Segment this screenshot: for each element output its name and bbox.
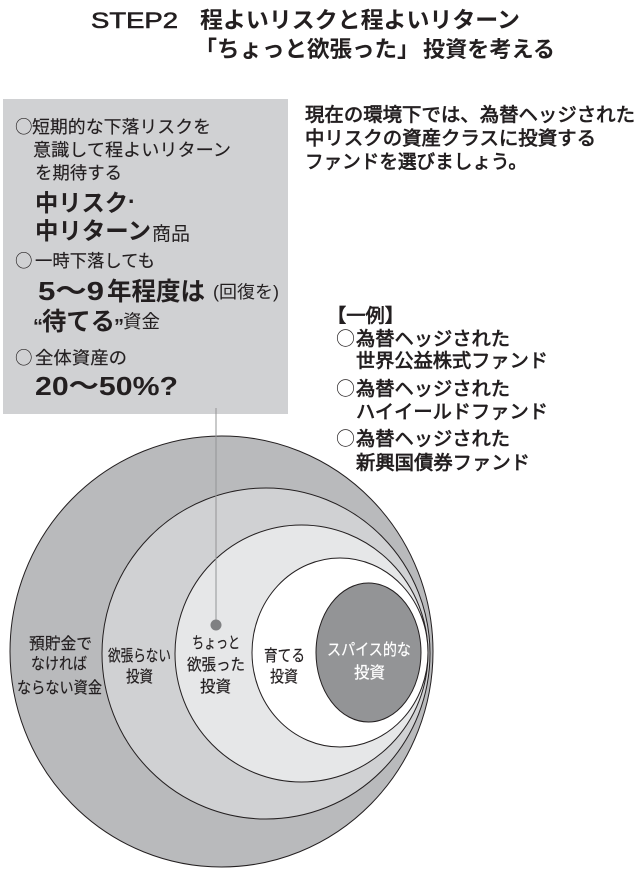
label: savings: 預貯金で [29,635,92,653]
emphasis: medium risk medium return [35,188,190,245]
examples list: 【一例】 [327,301,404,328]
emphasis: 5 to 9 years [38,276,279,306]
emphasis: money that can wait: “ [33,316,43,338]
title [91,8,555,64]
emphasis: 20 to 50 percent: 20～50%? [35,371,178,401]
label: slightly greedy investment: 投資 [200,678,231,696]
bullet 1 text: 短期的な下落リスクを [32,117,211,137]
examples list [327,301,548,474]
examples list: ○ [336,374,355,401]
emphasis: medium risk medium return: 中リスク [35,190,128,216]
circle: growth investment [252,558,428,747]
circle: savings [10,436,433,867]
panel background [3,99,288,414]
emphasis: medium risk medium return: 中リターン [35,218,151,244]
examples list: 世界公益株式ファンド [356,350,548,372]
emphasis: 5 to 9 years: 年程度は [107,278,205,306]
examples list: 為替ヘッジされた [356,328,510,350]
label: non-greedy investment: 欲張らない [108,647,171,665]
label: slightly greedy investment: ちょっと [192,635,240,652]
bullet 1 text [15,114,231,183]
examples list: 新興国債券ファンド [356,452,530,474]
bullet 1 text: を期待する [35,163,122,183]
panel: medium risk summary [3,99,288,414]
label: non-greedy investment: 投資 [126,668,153,686]
bullet 2 text [15,248,155,273]
leader line with dot [210,408,222,630]
bullet 3 text: 全体資産の [35,348,127,368]
emphasis: money that can wait [33,308,160,338]
emphasis: money that can wait: 資金 [123,311,160,332]
label: growth investment: 育てる [264,647,305,665]
title line 2: 「ちょっと欲張った」 [194,32,420,64]
advice text: 中リスクの資産クラスに投資する [305,128,596,150]
label: spice investment [327,641,411,682]
emphasis: medium risk medium return: 商品 [152,223,190,245]
bullet 1 text: 意識して程よいリターン [33,140,231,160]
advice text: ファンドを選びましょう。 [305,151,527,173]
examples list: 為替ヘッジされた [356,378,510,400]
bullet 3 text [15,345,127,370]
emphasis: money that can wait: ” [114,316,124,338]
examples list: ○ [336,424,355,451]
label: growth investment: 投資 [270,668,298,686]
title line 2: 投資を考える [423,37,555,62]
advice text [305,104,635,173]
label: spice investment: 投資 [354,664,385,682]
title step label: STEP2 [91,8,178,33]
examples list: ハイイールドファンド [356,402,548,423]
emphasis: money that can wait: 待てる [42,308,115,336]
title line 1: 程よいリスクと程よいリターン [200,8,520,33]
emphasis: medium risk medium return: · [128,188,136,214]
label: non-greedy investment [108,647,171,686]
nested circles chart [10,408,433,867]
advice text: 現在の環境下では、為替ヘッジされた [305,104,635,126]
examples list: 為替ヘッジされた [356,428,510,450]
circle: spice investment [316,583,421,722]
label: spice investment: スパイス的な [327,641,411,659]
circle: non-greedy investment [102,488,430,819]
title line 2 [194,32,555,64]
label: growth investment [264,647,305,686]
circle: slightly greedy investment [175,525,428,782]
examples list: ○ [336,324,355,351]
bullet 2 text: ○ [15,248,32,273]
emphasis: 5 to 9 years: 5～9 [38,276,104,306]
bullet 2 text: 一時下落しても [35,251,155,271]
label: savings: なければ [31,655,87,673]
emphasis: 5 to 9 years: (回復を) [213,282,279,302]
bullet 3 text: ○ [15,345,32,370]
label: savings: ならない資金 [17,679,102,697]
bullet 1 text: ○ [15,114,32,139]
label: savings [17,635,102,697]
label: slightly greedy investment [187,635,245,696]
label: slightly greedy investment: 欲張った [187,656,245,674]
